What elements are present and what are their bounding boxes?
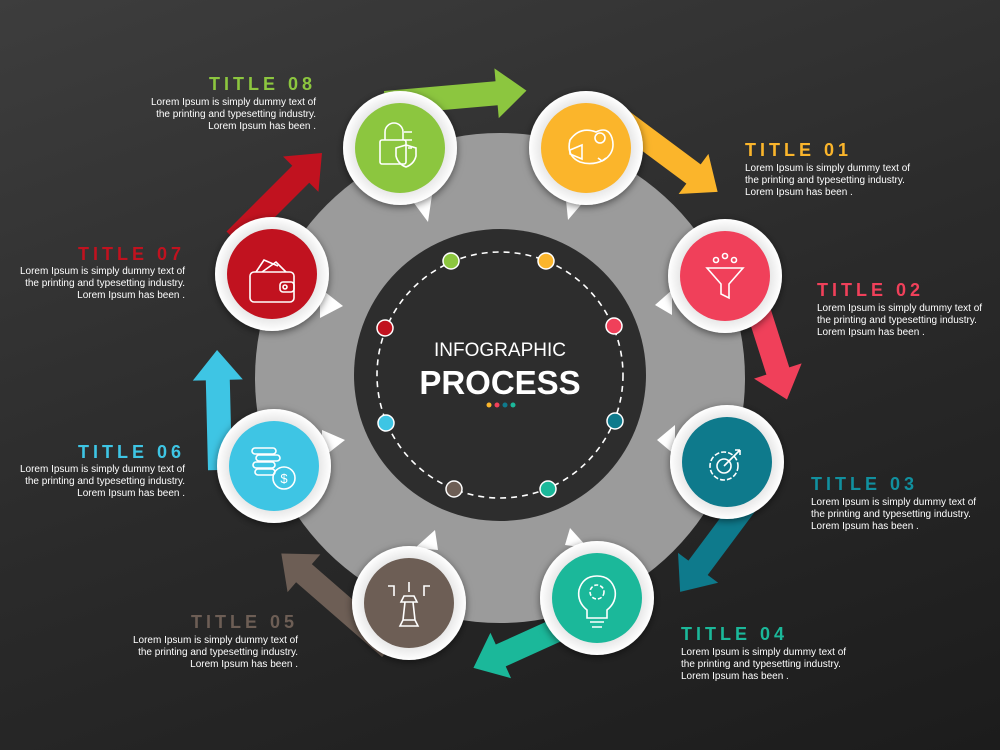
text 06 xyxy=(20,442,185,499)
text 08: Lorem Ipsum has been . xyxy=(208,121,316,132)
text 02: TITLE 02 xyxy=(817,280,924,300)
text 08: Lorem Ipsum is simply dummy text of xyxy=(151,97,316,108)
arrow 08 to 01 xyxy=(383,66,529,128)
text 01: the printing and typesetting industry. xyxy=(745,175,905,186)
arrow 03 to 04 xyxy=(660,463,785,607)
node 06: $ xyxy=(280,471,288,486)
text 03: the printing and typesetting industry. xyxy=(811,509,971,520)
text 03: Lorem Ipsum has been . xyxy=(811,521,919,532)
text 02: Lorem Ipsum is simply dummy text of xyxy=(817,303,982,314)
node 02 xyxy=(655,219,782,333)
text 01: TITLE 01 xyxy=(745,140,852,160)
node 07 xyxy=(215,217,343,331)
text 06: TITLE 06 xyxy=(78,442,185,462)
arrow 02 to 03 xyxy=(728,282,811,407)
text 08: TITLE 08 xyxy=(209,74,316,94)
center dark circle xyxy=(354,229,646,521)
text 04: Lorem Ipsum is simply dummy text of xyxy=(681,647,846,658)
text 07: the printing and typesetting industry. xyxy=(25,278,185,289)
text 02: the printing and typesetting industry. xyxy=(817,315,977,326)
node 05 xyxy=(352,530,466,660)
arrow 05 to 06 xyxy=(265,535,406,667)
text 04: TITLE 04 xyxy=(681,624,788,644)
text 07: Lorem Ipsum has been . xyxy=(77,290,185,301)
gray ring circle xyxy=(255,133,745,623)
text 05: TITLE 05 xyxy=(191,612,298,632)
text 06: Lorem Ipsum has been . xyxy=(77,488,185,499)
text 01 xyxy=(745,140,910,198)
arrow 04 to 05 xyxy=(463,592,600,691)
node 04 xyxy=(540,528,654,655)
text 05: the printing and typesetting industry. xyxy=(138,647,298,658)
node 03 xyxy=(657,405,784,519)
node 01 xyxy=(529,91,643,220)
text 04: Lorem Ipsum has been . xyxy=(681,671,789,682)
arrow 06 to 07 xyxy=(192,349,245,471)
text 08: the printing and typesetting industry. xyxy=(156,109,316,120)
text 07: Lorem Ipsum is simply dummy text of xyxy=(20,266,185,277)
text 03: Lorem Ipsum is simply dummy text of xyxy=(811,497,976,508)
center title: PROCESS xyxy=(419,364,581,401)
text 04: the printing and typesetting industry. xyxy=(681,659,841,670)
text 08 xyxy=(151,74,316,132)
arrow 07 to 08 xyxy=(217,135,340,258)
text 06: the printing and typesetting industry. xyxy=(25,476,185,487)
center title xyxy=(419,340,581,408)
text 07: TITLE 07 xyxy=(78,244,185,264)
text 01: Lorem Ipsum has been . xyxy=(745,187,853,198)
node 06 xyxy=(217,409,345,523)
text 04 xyxy=(681,624,846,682)
node 08 xyxy=(343,91,457,222)
text 03 xyxy=(811,474,976,532)
text 07 xyxy=(20,244,185,301)
arrow 01 to 02 xyxy=(587,86,733,212)
text 05: Lorem Ipsum is simply dummy text of xyxy=(133,635,298,646)
text 05: Lorem Ipsum has been . xyxy=(190,659,298,670)
text 02 xyxy=(817,280,982,338)
text 01: Lorem Ipsum is simply dummy text of xyxy=(745,163,910,174)
center title: INFOGRAPHIC xyxy=(434,340,566,361)
text 05 xyxy=(133,612,298,670)
text 06: Lorem Ipsum is simply dummy text of xyxy=(20,464,185,475)
text 03: TITLE 03 xyxy=(811,474,918,494)
text 02: Lorem Ipsum has been . xyxy=(817,327,925,338)
